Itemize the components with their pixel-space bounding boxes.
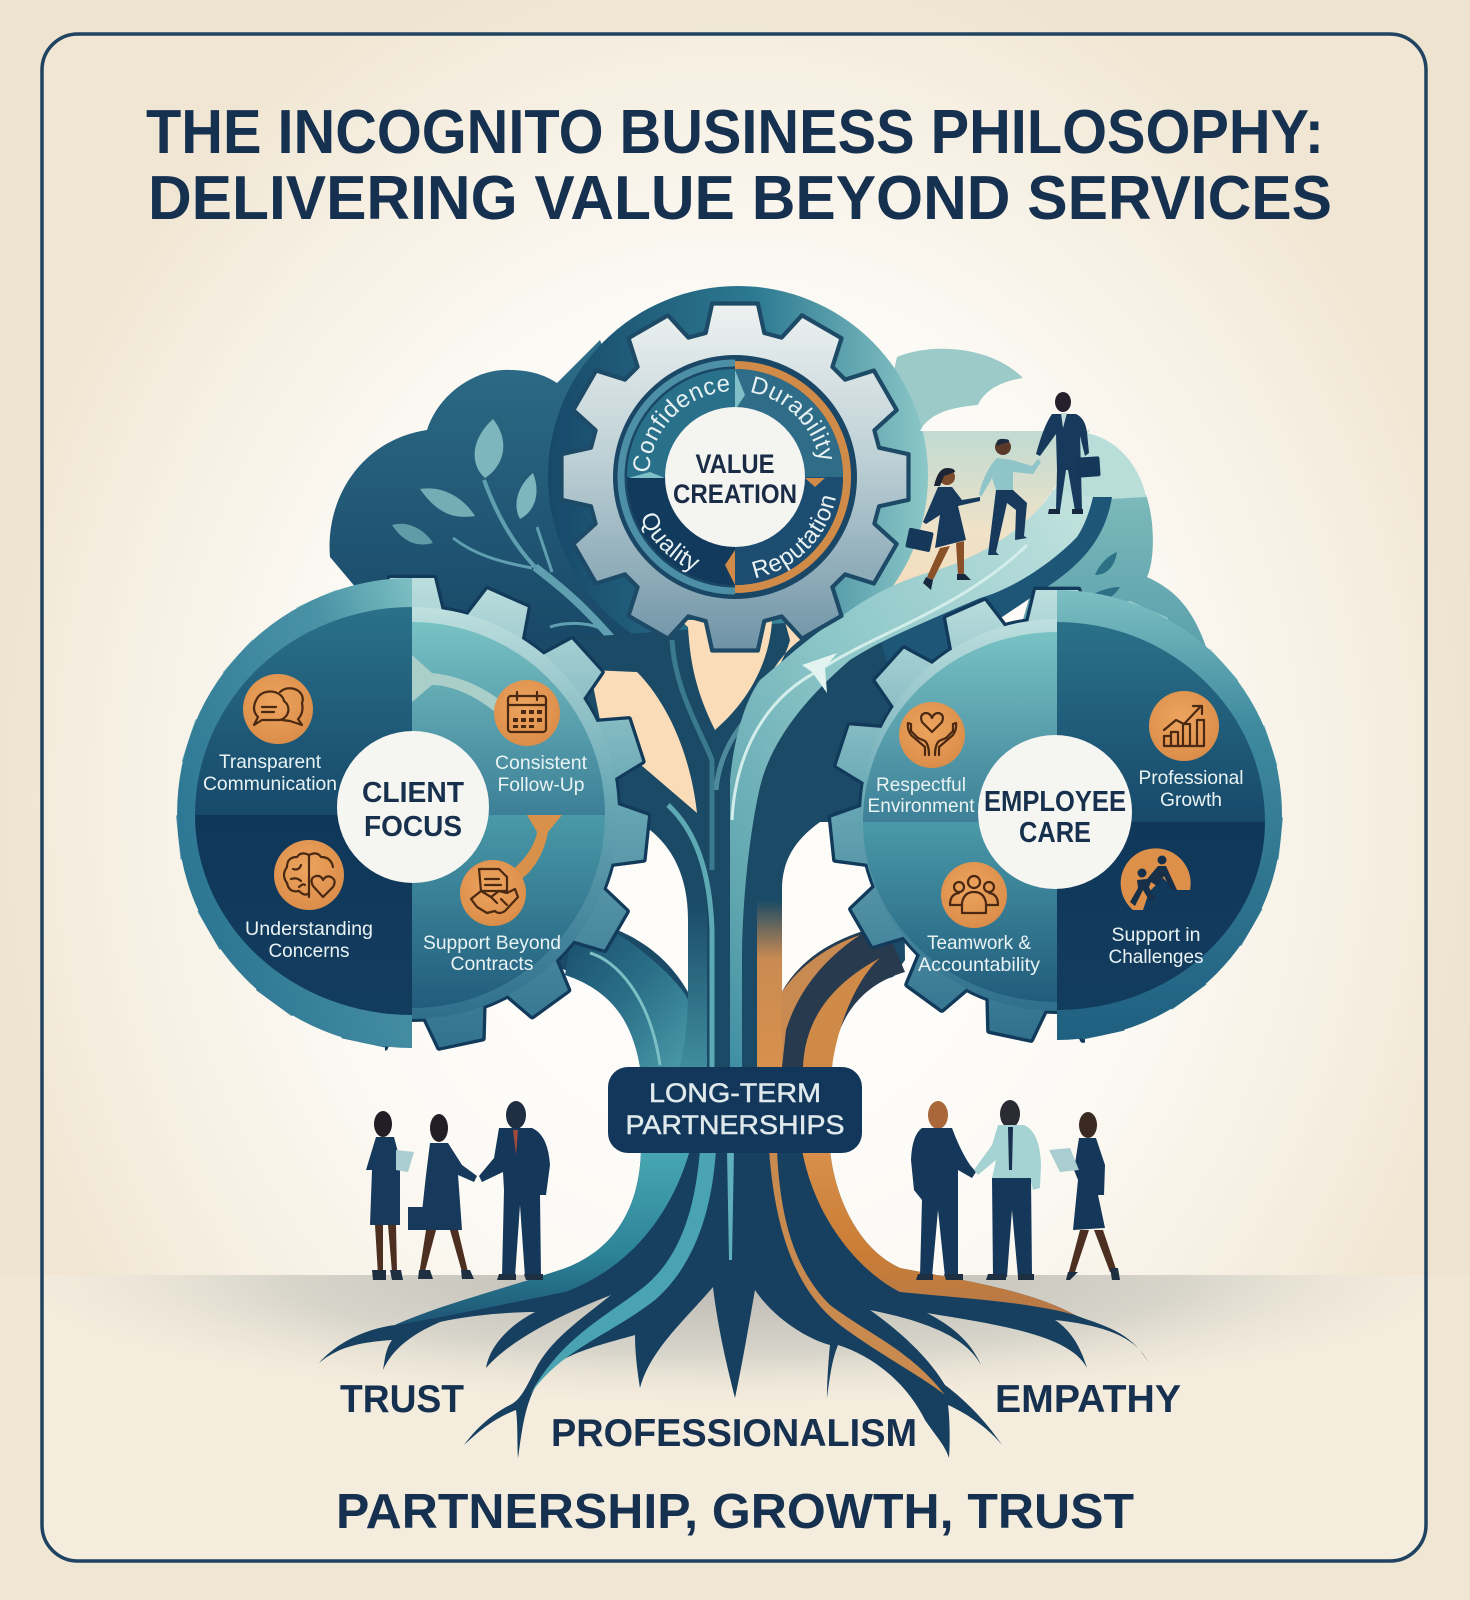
root labels: PROFESSIONALISM (551, 1412, 917, 1455)
label: teamwork and accountability: Teamwork & (927, 932, 1031, 954)
hub (665, 407, 805, 547)
hub (337, 731, 489, 883)
trunk left teal band (680, 900, 707, 1067)
hub label (984, 786, 1126, 849)
center root stripe (727, 1150, 734, 1260)
icon: chat bubbles (243, 674, 313, 744)
ring accent orange (735, 365, 847, 589)
people: right group (911, 1100, 1120, 1280)
light path (730, 490, 1093, 1067)
label: transparent communication: Communication (203, 773, 337, 795)
hub (978, 735, 1132, 889)
label: consistent follow-up: Follow-Up (498, 774, 585, 796)
right limb upper orange (782, 935, 860, 1067)
tree roots (319, 1150, 1148, 1458)
label: understanding concerns: Understanding (245, 918, 373, 940)
sector markers (628, 370, 825, 585)
label: respectful environment (868, 774, 975, 817)
man seen from behind (911, 1101, 976, 1280)
rim (177, 578, 412, 1048)
cloud (920, 378, 1095, 431)
tree trunk (540, 620, 905, 1067)
gear body (562, 304, 908, 650)
upper right foliage (880, 349, 1023, 432)
label: support beyond contracts (423, 932, 561, 975)
root labels: EMPATHY (995, 1378, 1181, 1421)
upper inner stripe left (672, 640, 712, 870)
label: respectful environment: Environment (868, 795, 975, 817)
panel: employee care (825, 585, 1285, 1045)
badge: long-term partnerships: PARTNERSHIPS (626, 1110, 844, 1140)
label: professional growth: Growth (1160, 789, 1222, 811)
path highlight line (732, 545, 1027, 820)
peach gap right (755, 622, 835, 705)
label: professional growth (1138, 767, 1244, 811)
sector confidence (627, 369, 735, 477)
white gap left (590, 830, 688, 992)
label: support beyond contracts: Contracts (450, 953, 534, 975)
hub label (673, 449, 797, 509)
trunk left stripe (668, 805, 712, 1067)
man at the top (1036, 392, 1101, 514)
icon: climbers helping (1121, 848, 1191, 910)
right limb (782, 925, 905, 1067)
label: teamwork and accountability: Accountability (918, 954, 1040, 976)
hub label: CREATION (673, 479, 797, 509)
climbers (905, 392, 1101, 590)
tree foliage and sky (330, 286, 1215, 740)
lower right foliage (1000, 495, 1215, 700)
trunk orange band (757, 900, 782, 1067)
teal root stripe (530, 1150, 716, 1395)
white gap right (782, 822, 885, 992)
hub label: CARE (1019, 817, 1091, 849)
people: left group (366, 1101, 550, 1280)
hub label: FOCUS (364, 811, 462, 843)
label: transparent communication: Transparent (219, 751, 322, 773)
sector reputation (735, 477, 843, 585)
icon: team (941, 862, 1007, 928)
arc labels: Confidence (633, 378, 729, 472)
rim (1057, 590, 1282, 1040)
gear: value creation: Durability (751, 376, 832, 459)
orange root overlay (802, 1150, 1075, 1315)
label: support in challenges: Challenges (1108, 946, 1204, 968)
gear: value creation: Reputation (752, 496, 836, 578)
left dark foliage (330, 340, 720, 740)
icon: growth chart (1149, 691, 1219, 761)
gear teeth (825, 585, 1285, 1045)
title: THE INCOGNITO BUSINESS PHILOSOPHY: (146, 98, 1324, 167)
icon: handshake and document (460, 860, 526, 926)
quadrant top right (412, 622, 605, 815)
central teal foliage circle (548, 286, 928, 666)
hub label: CLIENT (362, 777, 464, 809)
connector orange (512, 815, 562, 880)
label: respectful environment: Respectful (876, 774, 966, 796)
label: consistent follow-up (495, 752, 588, 796)
peach gap left (590, 670, 697, 813)
root labels: TRUST (340, 1378, 464, 1421)
leaves (392, 419, 1120, 604)
label: support in challenges (1108, 924, 1204, 968)
pale hill behind man (1053, 433, 1146, 540)
walking path branch (730, 490, 1112, 1067)
woman shaking hands (408, 1114, 477, 1279)
quadrant bottom right (412, 815, 605, 1008)
quadrant top left (195, 607, 412, 815)
hub label: VALUE (696, 449, 774, 479)
badge: long-term partnerships (608, 1067, 862, 1153)
dial ring (613, 355, 857, 599)
quadrant top left (863, 632, 1057, 822)
gear disc (206, 607, 618, 1019)
man shaking hands (479, 1101, 550, 1280)
quadrant bottom left (195, 815, 412, 1015)
tagline: PARTNERSHIP, GROWTH, TRUST (336, 1485, 1134, 1539)
title (146, 98, 1332, 233)
label: teamwork and accountability (918, 932, 1040, 976)
ring accent left (621, 363, 735, 591)
gear disc (861, 619, 1253, 1011)
arc paths (649, 391, 735, 477)
gear teeth outline (828, 586, 1085, 1043)
hub label: EMPLOYEE (984, 786, 1126, 818)
quadrant top right (1057, 622, 1265, 822)
label: understanding concerns: Concerns (268, 940, 350, 962)
gear teeth (170, 570, 660, 1060)
teal root overlay (395, 1150, 690, 1325)
hub label (362, 777, 464, 843)
label: transparent communication (203, 751, 337, 795)
sector quality (627, 477, 735, 585)
left limb highlight (590, 953, 660, 1065)
sector durability (735, 369, 843, 477)
icon: calendar (494, 680, 560, 746)
dark underside (880, 497, 1112, 700)
peach gap center (680, 620, 772, 730)
left limb (565, 915, 705, 1067)
label: consistent follow-up: Consistent (495, 752, 588, 774)
panel: client focus (170, 570, 660, 1060)
gear: value creation (563, 301, 911, 653)
woman climbing (905, 468, 980, 590)
orange root stripe (769, 1150, 945, 1395)
connector light (412, 655, 500, 712)
gear teeth outline (385, 574, 652, 1051)
label: support in challenges: Support in (1112, 924, 1200, 946)
root labels (340, 1378, 1181, 1455)
icon: brain and heart (274, 840, 344, 910)
man in light shirt (974, 1100, 1041, 1280)
branches on the left foliage (453, 480, 640, 672)
sky behind climbers (780, 430, 1090, 650)
gear: value creation: Quality (642, 513, 700, 572)
right limb lower orange (803, 958, 880, 1067)
quadrant bottom left (863, 822, 1057, 1002)
quadrant bottom right (1057, 822, 1265, 1010)
upper inner stripe right (716, 695, 767, 790)
woman with tablet (366, 1111, 414, 1280)
man climbing (979, 439, 1041, 555)
ground band (0, 1275, 1470, 1600)
label: support beyond contracts: Support Beyond (423, 932, 561, 954)
icon: hands and heart (899, 702, 965, 768)
path arrow (802, 653, 837, 693)
title: DELIVERING VALUE BEYOND SERVICES (148, 164, 1332, 233)
trunk base (540, 620, 905, 1067)
badge: long-term partnerships: LONG-TERM (649, 1078, 821, 1108)
woman with tablet (1049, 1112, 1120, 1280)
label: professional growth: Professional (1138, 767, 1244, 789)
label: understanding concerns (245, 918, 373, 962)
